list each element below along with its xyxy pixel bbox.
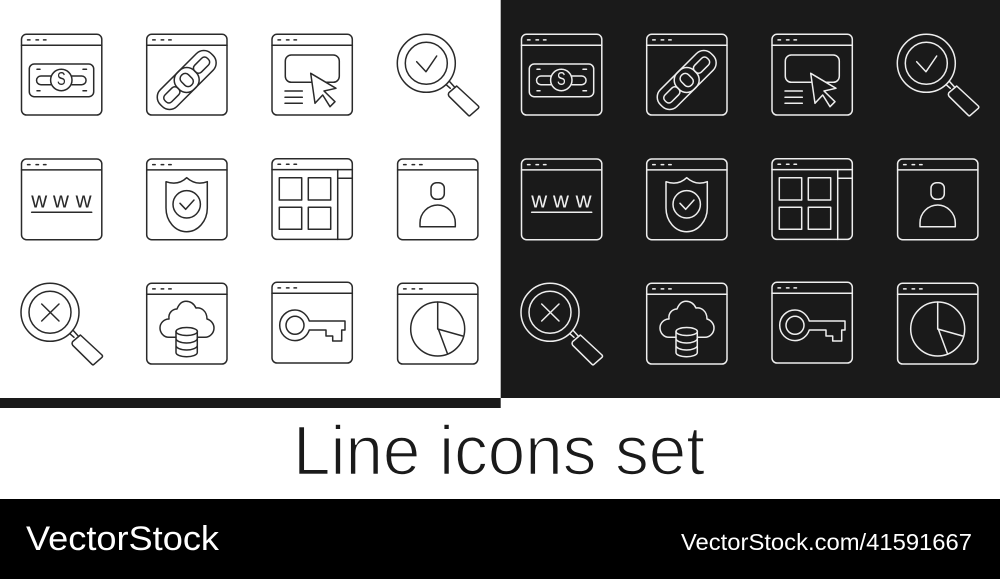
icon: browser with www [522, 159, 602, 240]
icon: browser with money: S [557, 69, 566, 89]
icon: browser with grid [272, 159, 352, 239]
icon: browser with www: www [30, 187, 92, 212]
footer bar [0, 499, 1000, 579]
icon: browser with www [22, 159, 102, 240]
dark icon set [521, 34, 979, 365]
icon: browser with cloud database [647, 283, 727, 364]
icon: browser with chain link [647, 34, 727, 115]
icon: browser with click cursor [272, 34, 352, 115]
icon: browser with money [22, 34, 102, 115]
icon: browser with pie chart [898, 283, 978, 364]
icon: browser with user [898, 159, 978, 240]
icon: browser with key [272, 282, 352, 363]
icon: browser with user [398, 159, 478, 240]
icon: browser with www: www [530, 187, 592, 212]
icon: browser with cloud database [147, 283, 227, 364]
icon: browser with shield [147, 159, 227, 240]
icon: magnifier with cross [21, 283, 102, 365]
black strip under light panel [0, 398, 501, 408]
icon: browser with money: S [57, 69, 66, 89]
light icon set [21, 34, 479, 365]
icon: browser with key [772, 282, 852, 363]
title: Line icons set [293, 411, 705, 489]
icon: browser with pie chart [398, 283, 478, 364]
icon: browser with shield [647, 159, 727, 240]
icon: magnifier with cross [521, 283, 602, 365]
icon: browser with grid [772, 159, 852, 239]
icon: browser with money [522, 34, 602, 115]
icon: magnifier with check [397, 34, 479, 116]
footer logo text: VectorStock [26, 520, 220, 558]
icon: magnifier with check [897, 34, 979, 116]
panel: dark background [501, 0, 1000, 398]
footer image id: VectorStock.com/41591667 [681, 529, 972, 555]
icon: browser with click cursor [772, 34, 852, 115]
icon: browser with chain link [147, 34, 227, 115]
